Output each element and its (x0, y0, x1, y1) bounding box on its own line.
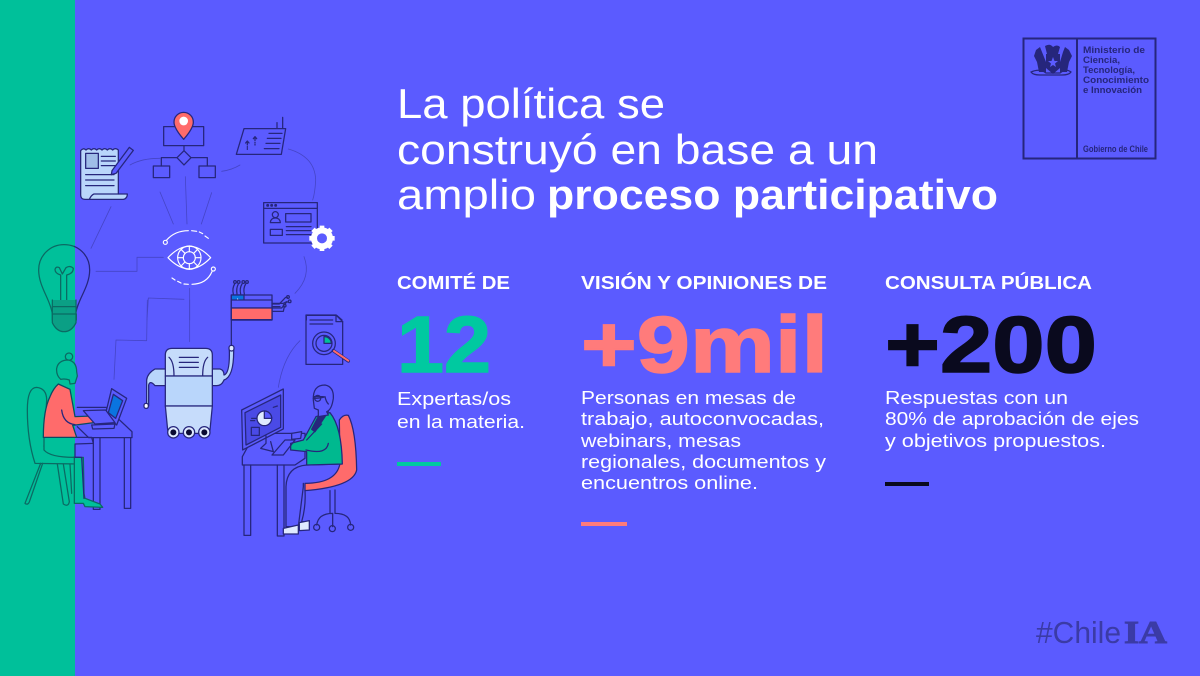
connector lines (114, 300, 300, 387)
icon: document with magnifier (306, 315, 348, 364)
description (580, 388, 826, 493)
light bulb base (52, 300, 76, 332)
monitor (242, 389, 283, 450)
hashtag: #Chile (1036, 615, 1121, 650)
green side band (0, 0, 75, 676)
description: Respuestas con un (885, 388, 1068, 408)
label: VISIÓN Y OPINIONES DE (581, 272, 827, 293)
description: regionales, documentos y (581, 452, 826, 472)
description: en la materia. (397, 412, 525, 432)
legs (44, 437, 103, 507)
description: 80% de aprobación de ejes (885, 409, 1139, 429)
description (885, 388, 1139, 451)
icon: profile window with gear (264, 203, 335, 251)
title: construyó en base a un (397, 126, 878, 173)
flag bottom (231, 300, 287, 346)
description: trabajo, autoconvocadas, (581, 409, 824, 429)
description: Personas en mesas de (581, 388, 796, 408)
icon: tilted chart card (236, 117, 286, 154)
description: Expertas/os (397, 389, 511, 409)
description: webinars, mesas (580, 431, 741, 451)
stat column: consulta (885, 272, 1139, 486)
number: +9mil (581, 300, 828, 389)
head (313, 385, 333, 417)
legs (286, 464, 342, 527)
description (397, 389, 525, 432)
icon: gear (309, 226, 335, 251)
jacket (291, 413, 342, 465)
title: proceso participativo (547, 171, 998, 218)
icon: flag robot head (231, 281, 291, 320)
stat column: comité (397, 272, 525, 466)
laptop (106, 389, 127, 425)
hair and head (65, 353, 73, 360)
stat column: visión (580, 272, 828, 526)
accent bar (885, 482, 929, 486)
chair (25, 387, 79, 505)
ministry name: Ministerio de (1083, 45, 1145, 56)
number: +200 (885, 300, 1097, 389)
icon: coat of arms (1031, 45, 1072, 75)
icon: eye (163, 231, 215, 284)
ministry name: Conocimiento (1083, 75, 1149, 86)
chair (305, 415, 357, 491)
robot (144, 345, 234, 438)
accent bar (397, 462, 441, 466)
man at desktop (242, 385, 357, 536)
keyboard (272, 440, 295, 455)
hashtag (1036, 614, 1167, 650)
title: amplio (397, 171, 536, 218)
number: 12 (397, 300, 491, 389)
desk (242, 433, 305, 465)
icon: document with pencil (81, 147, 133, 199)
label: COMITÉ DE (397, 272, 510, 293)
illustration: upper icons (39, 112, 342, 320)
woman at laptop (25, 353, 132, 509)
title: La política se (397, 80, 665, 127)
title (397, 80, 998, 218)
label: CONSULTA PÚBLICA (885, 272, 1092, 293)
description: encuentros online. (581, 473, 758, 493)
icon: document corner (306, 315, 342, 320)
ministry name: Tecnología, (1083, 65, 1135, 76)
icon: map pin (174, 112, 193, 139)
ministry name: Ciencia, (1083, 55, 1120, 66)
icon: flowchart with map pin (153, 112, 215, 178)
ministry name: Gobierno de Chile (1083, 144, 1148, 155)
dashed connector lines (91, 149, 316, 320)
illustration: people and robot (25, 300, 357, 536)
accent bar (581, 522, 627, 526)
hashtag: IA (1124, 614, 1167, 650)
icon: light bulb (39, 245, 90, 320)
description: y objetivos propuestos. (885, 431, 1106, 451)
desk (77, 407, 132, 438)
ministry name: e Innovación (1083, 85, 1142, 96)
ministry name (1083, 45, 1149, 155)
logo: Ministerio de Ciencia (1024, 38, 1156, 159)
